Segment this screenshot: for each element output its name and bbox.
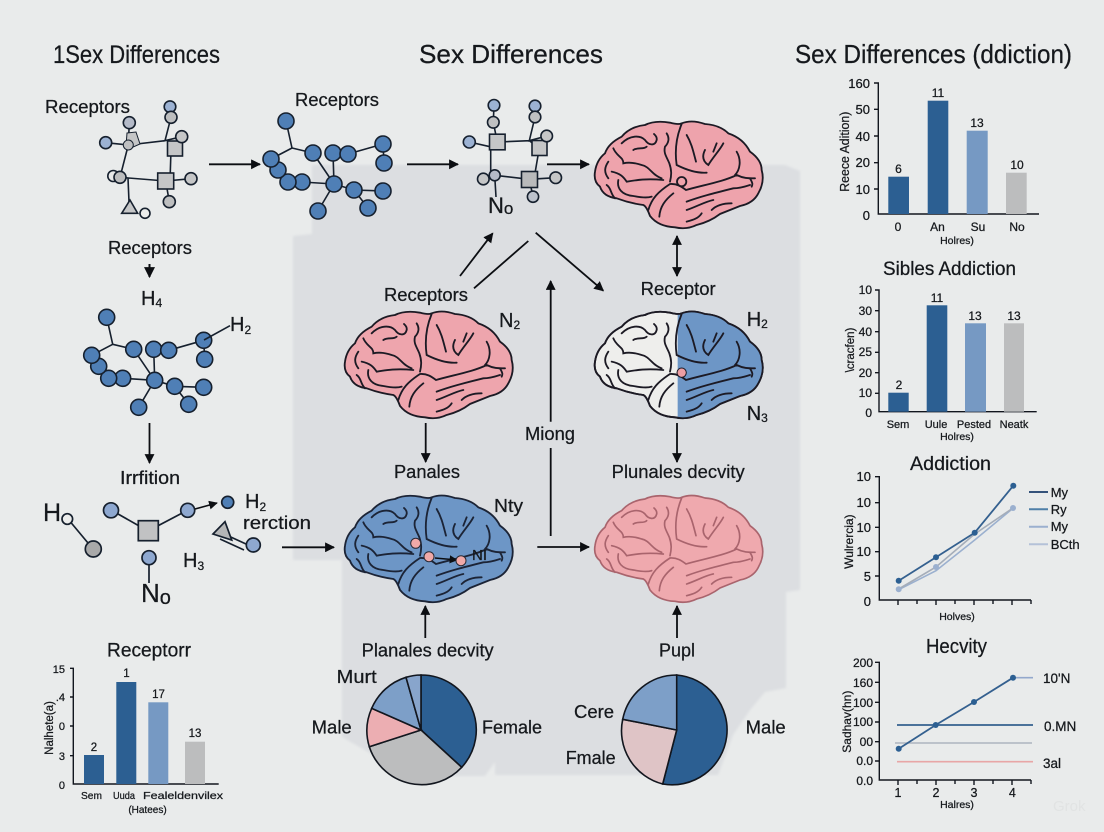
bar chart: bottom left: 0: [59, 721, 65, 733]
bar chart: siblings addiction: 10: [859, 283, 872, 297]
line chart: heavity: 160: [853, 676, 873, 690]
molecule: reaction group: [43, 491, 311, 609]
molecule: top left: [100, 101, 197, 218]
legend: Ry: [1051, 502, 1067, 517]
label: Miong: Miong: [525, 424, 575, 444]
label: H with O ring: H: [43, 499, 61, 527]
line chart: addiction: Holves): [939, 611, 975, 623]
bar chart: siblings addiction: Sem: [887, 419, 909, 431]
arrow: up to blue brain: [424, 606, 426, 638]
line chart: addiction: Wulrercia): [842, 514, 856, 569]
bar chart: bottom left: 2: [91, 742, 97, 754]
legend: [1029, 485, 1080, 552]
arrow: blue brain to pink brain: [537, 546, 589, 548]
label: H4: H: [141, 288, 155, 310]
arrow: molecule to right brain: [536, 233, 603, 291]
brain: center pink: [345, 311, 513, 418]
line chart: heavity: Sadhav(hn): [840, 691, 854, 753]
label: Plunales decvity: Plunales decvity: [612, 462, 745, 482]
bar chart: top right: 11: [932, 86, 945, 100]
label: No: o: [160, 587, 171, 609]
bar chart: bottom left: 0: [59, 780, 65, 792]
line chart: addiction: 10: [857, 469, 871, 484]
arrow: center brain down: [425, 423, 427, 462]
bar chart: siblings addiction: 13: [968, 309, 982, 323]
pie labels: left: Male: [312, 717, 352, 737]
label: H2 right: 2: [761, 317, 768, 331]
bar chart: bottom left: 17: [152, 689, 165, 701]
bar chart: siblings addiction: 25: [859, 345, 872, 359]
pie labels: left: Female: [482, 717, 542, 737]
brain: light pink: [595, 495, 763, 602]
molecule: center with No label: [463, 100, 562, 218]
label: H3: 3: [197, 559, 204, 573]
arrow: network to center molecule: [407, 163, 458, 165]
bar chart: top right: Su: [971, 220, 985, 234]
chart title: Sibles Addiction: [883, 259, 1016, 280]
line chart: addiction: 5: [864, 569, 871, 584]
line chart: heavity: 0.0: [856, 754, 873, 768]
arrow: right brain down: [676, 423, 678, 462]
pie chart: left: [367, 675, 476, 785]
label: H4: 4: [155, 296, 162, 310]
label: No: N: [488, 193, 504, 218]
title: center: Sex Differences: [419, 39, 603, 69]
line chart: heavity: [840, 636, 1076, 811]
label: reaction: rerction: [243, 513, 311, 533]
line chart: heavity: 2: [933, 786, 940, 800]
bar chart: bottom left: Sem: [81, 790, 102, 802]
bar chart: bottom left: (Hatees): [128, 805, 167, 816]
bar chart: siblings addiction: 0: [865, 406, 872, 420]
line chart: heavity: 00: [860, 735, 873, 749]
label: H3: H: [183, 550, 197, 572]
line chart: heavity: 200: [853, 656, 873, 670]
background panel: [293, 165, 800, 776]
legend: My: [1051, 519, 1069, 534]
label: N2: 2: [513, 318, 520, 332]
arrow: receptors up to molecule: [460, 233, 493, 276]
pie labels: right: Cere: [574, 702, 614, 722]
H2 bond label: 2: [244, 323, 251, 337]
series labels: [1043, 671, 1076, 771]
bar chart: top right: 0: [863, 208, 870, 223]
label: Panales: Panales: [394, 462, 460, 482]
network: top middle: [263, 113, 392, 219]
title: right: Sex Differences (ddiction): [795, 39, 1072, 69]
brain: blue with nodes: [345, 495, 513, 602]
line chart: addiction: 0: [864, 594, 871, 609]
line chart: heavity: 100: [853, 715, 873, 729]
pie labels: left: Murt: [337, 667, 377, 687]
label: receptors left column: Receptors: [108, 238, 192, 258]
label: H2: H: [245, 491, 259, 513]
bar chart: top right: Reece Adition): [838, 112, 852, 192]
bar chart: siblings addiction: Neatk: [1000, 419, 1029, 431]
line chart: heavity: 4: [1009, 786, 1016, 800]
bar chart: top right: 20: [856, 155, 870, 170]
brain: top right pink: [595, 121, 763, 228]
line chart: heavity: 3: [971, 786, 978, 800]
bar chart: bottom left: Uuda: [113, 790, 135, 802]
bar chart: top right: 50: [856, 102, 870, 117]
arrow: vertical upper segment: [550, 281, 552, 422]
bar chart: top right: 13: [970, 116, 984, 130]
label: N2: N: [499, 310, 513, 332]
arrow: up to pink brain: [676, 606, 678, 638]
line chart: addiction: 10: [857, 544, 871, 559]
label: Pupl: Pupl: [659, 641, 695, 661]
label: Nty: Nty: [494, 496, 523, 516]
label: NI: NI: [472, 547, 487, 564]
label: receptors top left: Receptors: [45, 97, 130, 117]
bar chart: top right: 40: [856, 129, 870, 144]
label: Planales decvity: Planales decvity: [362, 641, 494, 661]
bar chart: bottom left: .4: [56, 692, 65, 704]
bar chart: top right: No: [1009, 220, 1025, 234]
pie chart: right: [621, 675, 727, 785]
label: N3: 3: [761, 411, 768, 425]
chart title: Addiction: [910, 454, 991, 475]
bar chart: bottom left: Nalhete(a): [44, 701, 56, 755]
arrow: double vertical: [676, 236, 678, 276]
pie labels: right: Fmale: [566, 748, 616, 768]
connector: vertical lower segment: [550, 448, 552, 536]
bar chart: top right: An: [930, 220, 945, 234]
bar chart: siblings addiction: 10: [859, 386, 872, 400]
line chart: heavity: 0.0: [856, 774, 873, 788]
arrow: center molecule to brain: [547, 163, 589, 165]
bar chart: top right: 10: [856, 182, 870, 197]
network: left column: [84, 309, 213, 415]
bar chart: siblings addiction: 20: [859, 366, 872, 380]
arrow: network down: [148, 423, 150, 463]
bar chart: top right: 10: [1010, 158, 1024, 172]
series labels: 3al: [1043, 756, 1061, 771]
series labels: 10'N: [1043, 671, 1070, 686]
bar chart: bottom left: 3: [59, 751, 65, 763]
label: right receptor: Receptor: [641, 279, 716, 299]
arrow: into blue brain: [282, 546, 334, 548]
bar chart: siblings addiction: 2: [896, 378, 903, 392]
label: No: o: [504, 199, 513, 218]
bar chart: top right: 0: [895, 220, 902, 234]
pie labels: right: [566, 702, 786, 768]
bar chart: siblings addiction: 11: [931, 291, 944, 305]
line chart: heavity: 1: [895, 786, 902, 800]
H2 bond label: H: [230, 314, 244, 336]
bar chart: bottom left: 13: [189, 728, 201, 740]
line chart: addiction: [842, 454, 1080, 623]
legend: BCth: [1051, 537, 1080, 552]
label: H2 right: H: [747, 309, 761, 331]
arrow: molecule to network: [209, 163, 260, 165]
label: Irrfition: Irrfition: [120, 468, 180, 488]
label: No: N: [141, 578, 160, 608]
H2 bond label: [204, 314, 251, 340]
bar chart: top right: 160: [848, 76, 870, 91]
watermark: Grok: [1053, 798, 1086, 815]
bar chart: siblings addiction: Uule: [925, 419, 947, 431]
arrow: small down: [148, 264, 150, 277]
bar chart: siblings addiction: [845, 259, 1037, 443]
bar chart: bottom left: 15: [53, 664, 65, 676]
bar chart: siblings addiction: 30: [859, 304, 872, 318]
label: H2: 2: [259, 500, 266, 514]
pie labels: left: [312, 667, 542, 737]
line chart: heavity: 100: [853, 696, 873, 710]
chart title: Receptorr: [107, 641, 192, 662]
bar chart: bottom left: 1: [123, 668, 130, 680]
bar chart: siblings addiction: Pested: [957, 419, 991, 431]
bar chart: siblings addiction: Holres): [940, 431, 974, 443]
label: center receptors: Receptors: [384, 285, 468, 305]
chart title: Hecvity: [926, 636, 987, 658]
label: receptors top middle: Receptors: [295, 90, 379, 110]
bar chart: siblings addiction: 40: [859, 325, 872, 339]
pie labels: right: Male: [746, 717, 786, 737]
legend: My: [1051, 485, 1069, 500]
line chart: addiction: 10: [857, 495, 871, 510]
bar chart: bottom left: Fealeldenvilex: [143, 790, 224, 802]
series labels: 0.MN: [1044, 719, 1076, 734]
bar chart: bottom left: [44, 641, 224, 816]
label: N3: N: [747, 403, 761, 425]
bar chart: top right: 6: [895, 162, 902, 176]
bar chart: top right: [838, 76, 1039, 247]
title: left: 1Sex Differences: [53, 41, 220, 69]
line chart: heavity: Halres): [940, 799, 974, 811]
connector line: [474, 241, 528, 288]
bar chart: siblings addiction: \cracfen): [845, 327, 857, 372]
line chart: addiction: 10: [857, 520, 871, 535]
bar chart: siblings addiction: 13: [1007, 309, 1021, 323]
bar chart: top right: Holres): [940, 235, 974, 247]
brain: white and blue two-tone: [595, 311, 763, 418]
